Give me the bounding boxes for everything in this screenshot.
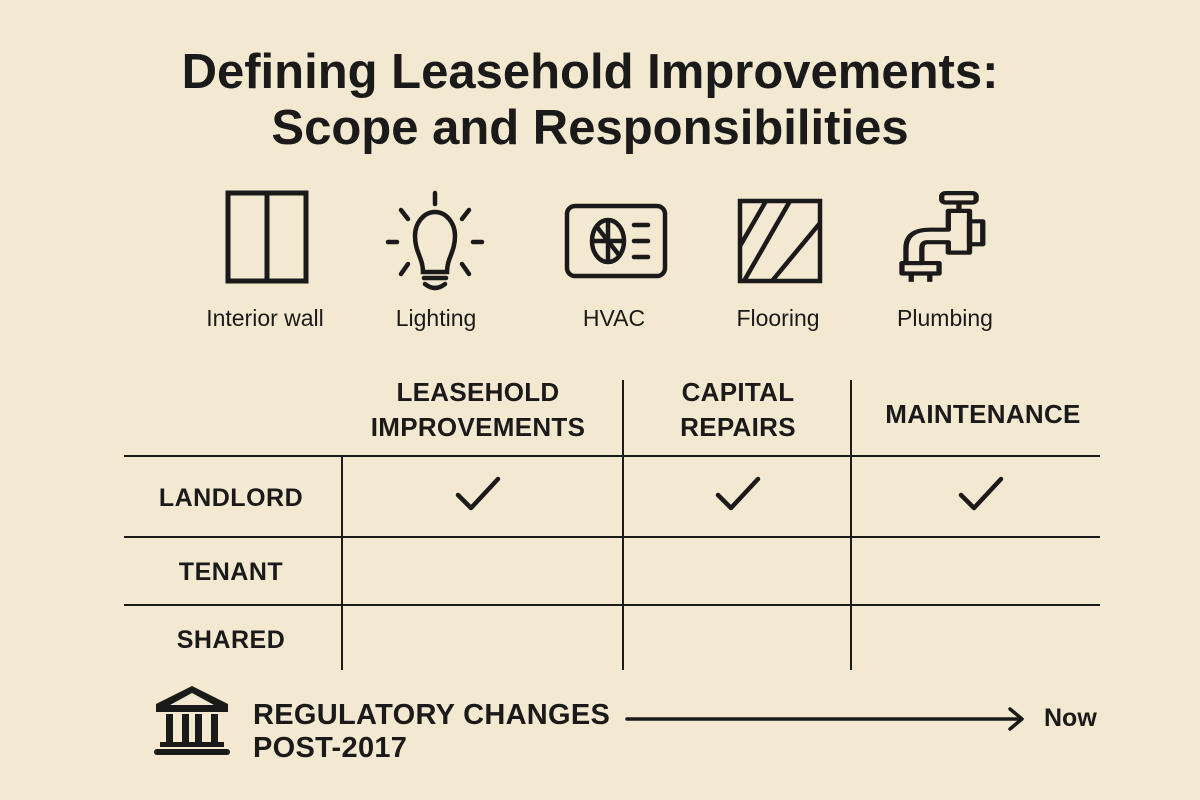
responsibility table: TENANT [179,558,283,586]
icon: HVAC [564,204,668,278]
responsibility table: REPAIRS [680,412,796,442]
column headers [371,377,585,442]
now label: Now [1044,704,1097,732]
icon: interior wall [226,190,308,284]
responsibility table: CAPITAL [682,377,794,407]
icon labels: Plumbing [897,305,993,331]
icon row [226,190,986,290]
title [182,45,998,155]
regulatory text [253,699,610,764]
icon: flooring [738,198,822,284]
icon: plumbing [899,191,986,282]
row labels: LANDLORD [159,484,303,512]
column headers: IMPROVEMENTS [371,412,585,442]
regulatory text: REGULATORY CHANGES [253,699,610,731]
responsibility table: SHARED [177,626,285,654]
responsibility table: MAINTENANCE [885,399,1081,429]
column headers: LEASEHOLD [396,377,560,407]
icon labels: Lighting [396,305,476,331]
icon: lighting [386,190,484,290]
checkmarks [456,476,500,510]
arrow [625,707,1024,731]
title: Scope and Responsibilities [271,101,909,155]
icon labels: Flooring [736,305,820,331]
icon labels: HVAC [583,305,645,331]
title: Defining Leasehold Improvements: [182,45,998,99]
icon labels [206,305,993,331]
responsibility table [124,377,1100,670]
icon: government building [154,686,230,755]
icon labels: Interior wall [206,305,324,331]
regulatory text: POST-2017 [253,732,407,764]
